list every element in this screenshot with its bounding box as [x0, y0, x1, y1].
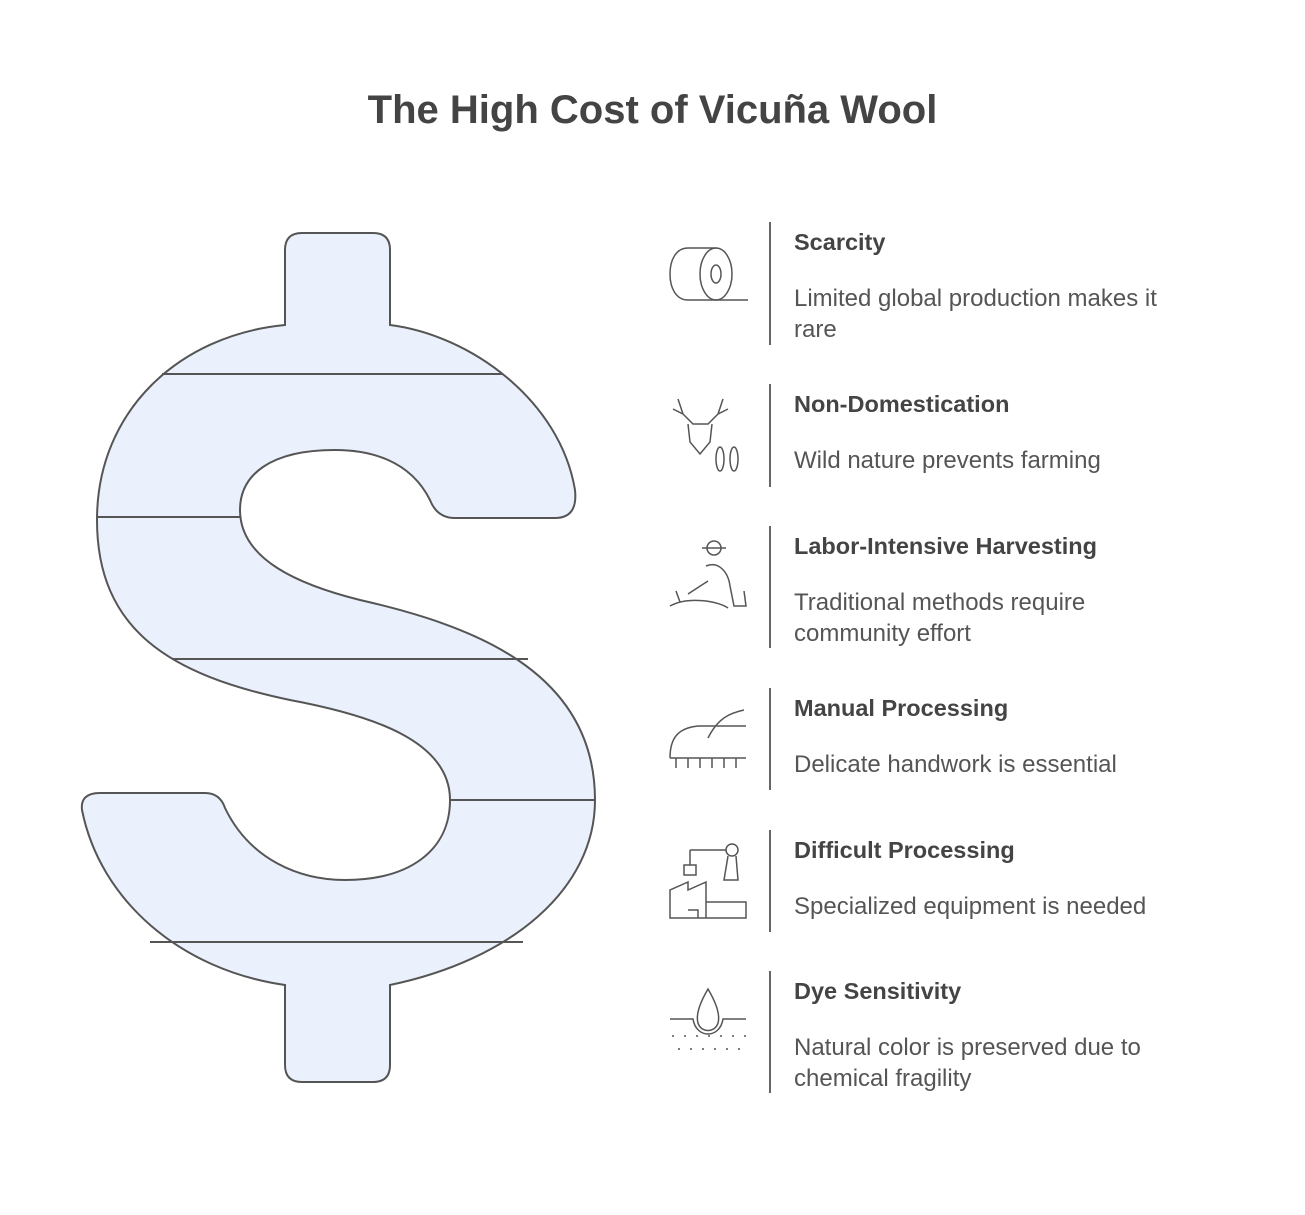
- item: scarcity: [669, 222, 1157, 345]
- item: difficult: Difficult Processing: [794, 837, 1015, 863]
- item: non-domestication: [672, 384, 1101, 487]
- icon: deer: [672, 398, 739, 472]
- icon: drop soil: [670, 988, 746, 1050]
- item: labor: Traditional methods require community effort: [794, 589, 1085, 647]
- icon: harvester: [670, 540, 747, 609]
- item: difficult: Specialized equipment is needed: [794, 893, 1146, 920]
- item: non-domestication: Non-Domestication: [794, 391, 1009, 417]
- item: dye: Natural color is preserved due to chemical fragility: [794, 1034, 1141, 1092]
- icon: hand brush: [669, 709, 746, 768]
- icon: factory: [669, 843, 747, 919]
- item: manual: [669, 688, 1117, 790]
- icon: roll: [669, 247, 748, 301]
- item: manual: Delicate handwork is essential: [794, 751, 1117, 778]
- item: scarcity: Limited global production makes it rare: [794, 285, 1157, 343]
- item: manual: Manual Processing: [794, 695, 1008, 721]
- item: dye: Dye Sensitivity: [794, 978, 961, 1004]
- item: labor: Labor-Intensive Harvesting: [794, 533, 1097, 559]
- item: non-domestication: Wild nature prevents farming: [794, 447, 1101, 474]
- item: difficult: [669, 830, 1146, 932]
- item: scarcity: Scarcity: [794, 229, 885, 255]
- item: dye: [670, 971, 1141, 1093]
- dollar sign: [80, 232, 596, 1083]
- item: labor: [670, 526, 1097, 648]
- title: The High Cost of Vicuña Wool: [368, 88, 937, 132]
